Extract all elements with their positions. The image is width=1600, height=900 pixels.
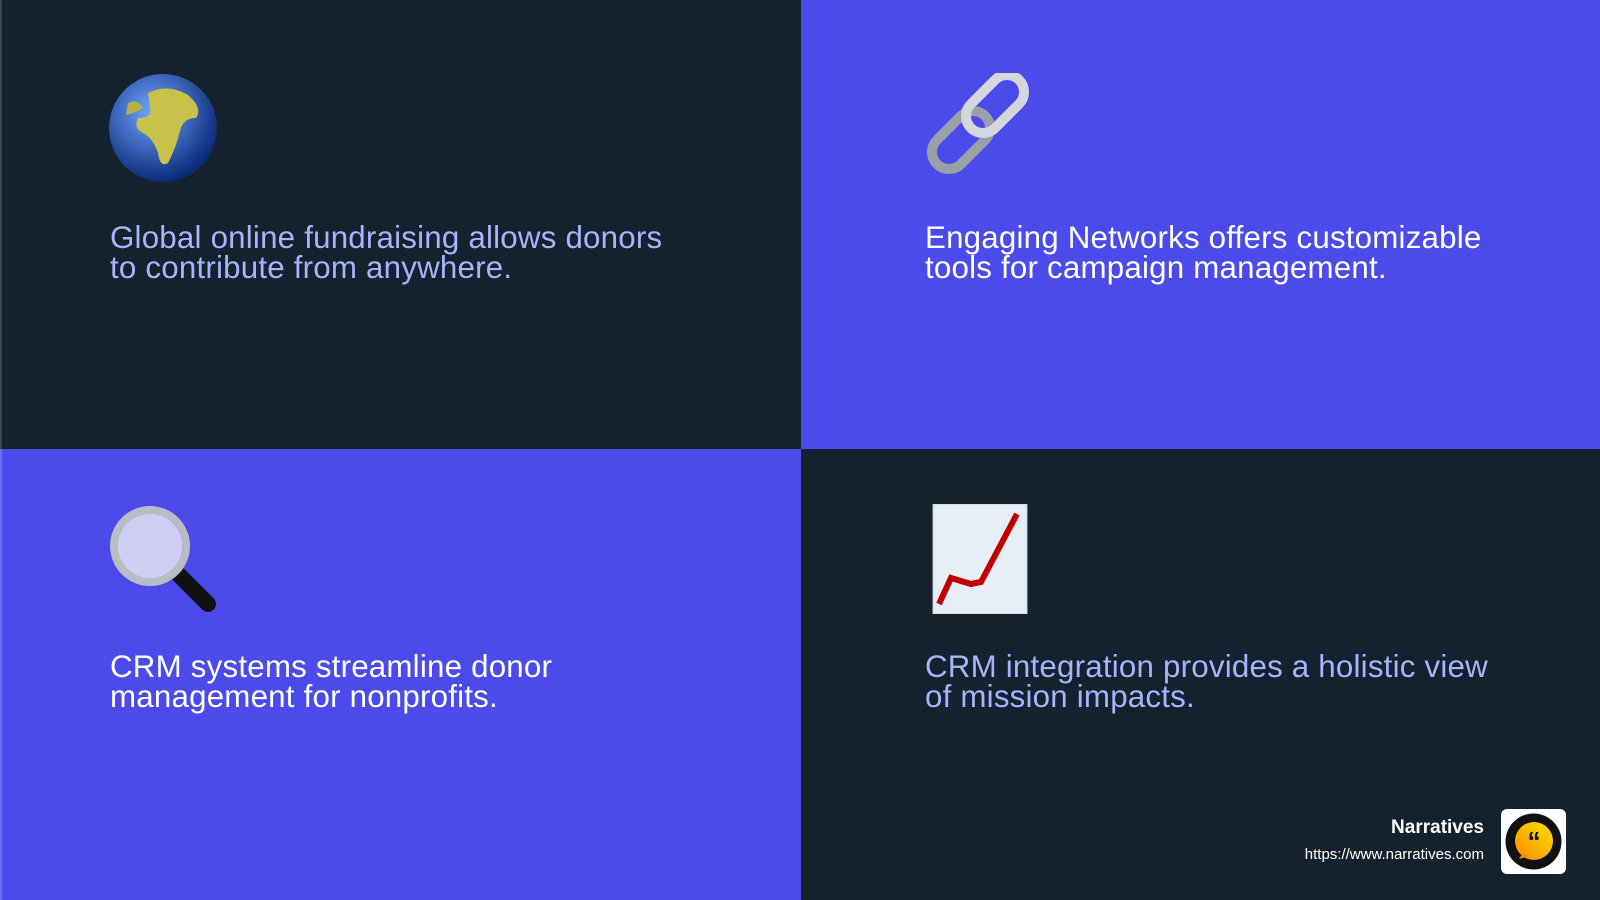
icon: globe <box>109 74 217 182</box>
brand url: https://www.narratives.com <box>1305 846 1484 863</box>
panel: global fundraising <box>0 0 801 449</box>
text: engaging networks <box>925 220 1482 285</box>
icon: chain link <box>927 73 1029 174</box>
text: engaging networks: tools for campaign management. <box>925 250 1387 285</box>
text: crm integration <box>925 649 1488 714</box>
text: crm systems: CRM systems streamline donor <box>110 649 552 684</box>
text: crm integration: of mission impacts. <box>925 679 1195 714</box>
footer: brand <box>1305 809 1566 874</box>
text: global fundraising: Global online fundraising allows donors <box>110 220 662 255</box>
icon: chart <box>932 504 1028 614</box>
text: global fundraising <box>110 220 662 285</box>
icon: logo: “ <box>1528 826 1540 856</box>
icon: magnifying glass <box>110 506 216 612</box>
text: crm integration: CRM integration provides a holistic view <box>925 649 1488 684</box>
text: crm systems: management for nonprofits. <box>110 679 498 714</box>
text: global fundraising: to contribute from anywhere. <box>110 250 512 285</box>
text: crm systems <box>110 649 552 714</box>
text: engaging networks: Engaging Networks offers customizable <box>925 220 1482 255</box>
panel: engaging networks <box>801 0 1600 449</box>
panel: crm integration <box>801 449 1600 900</box>
panel: crm systems <box>0 449 801 900</box>
icon: logo <box>1501 809 1566 874</box>
brand name: Narratives <box>1391 817 1484 838</box>
